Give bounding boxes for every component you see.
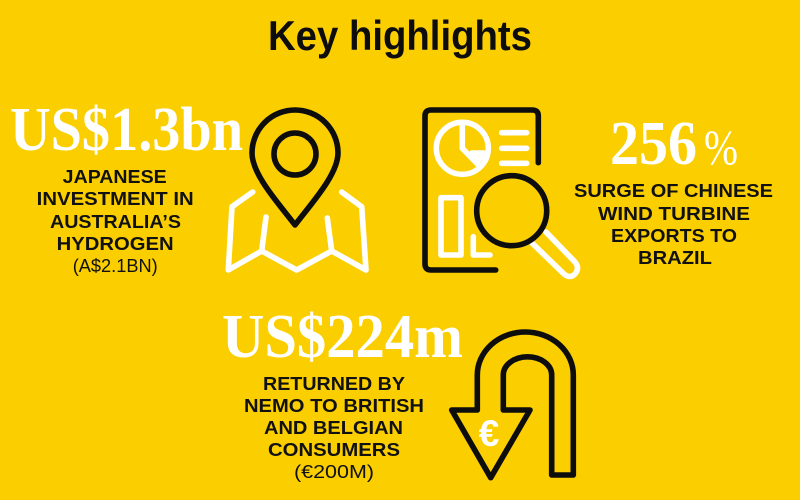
- label: wind turbine exports text: [574, 180, 773, 268]
- stat: US$224m: US$224m: [222, 303, 463, 371]
- panel: Japanese investment: [10, 96, 366, 276]
- label: Japanese investment text: AUSTRALIA’S: [50, 211, 181, 232]
- label: Nemo text: (€200M): [294, 461, 374, 482]
- label: Japanese investment text: INVESTMENT IN: [37, 188, 194, 209]
- label: Japanese investment text: JAPANESE: [63, 166, 167, 187]
- icon: map with location pin: [228, 110, 366, 270]
- stat: 256%: 256: [610, 110, 697, 178]
- panel: Chinese wind turbine exports: [425, 110, 773, 276]
- label: Japanese investment text: [37, 166, 194, 276]
- label: Nemo text: [244, 373, 424, 482]
- stat: 256%: %: [704, 119, 738, 175]
- icon: euro sign: €: [479, 413, 499, 454]
- stat: US$1.3bn: US$1.3bn: [10, 96, 243, 164]
- panel: Nemo returned funds: [222, 303, 573, 482]
- label: Japanese investment text: (A$2.1BN): [73, 255, 158, 276]
- label: wind turbine exports text: BRAZIL: [638, 247, 712, 268]
- title: Key highlights: [268, 12, 532, 59]
- label: wind turbine exports text: WIND TURBINE: [598, 203, 750, 224]
- label: Japanese investment text: HYDROGEN: [57, 233, 174, 254]
- icon: return arrow with euro: [452, 332, 573, 478]
- label: wind turbine exports text: EXPORTS TO: [611, 225, 737, 246]
- label: wind turbine exports text: SURGE OF CHINESE: [574, 180, 773, 201]
- label: Nemo text: AND BELGIAN: [264, 417, 403, 438]
- label: Nemo text: CONSUMERS: [268, 439, 400, 460]
- label: Nemo text: NEMO TO BRITISH: [244, 395, 424, 416]
- icon: report with magnifier: [425, 110, 578, 276]
- label: Nemo text: RETURNED BY: [263, 373, 406, 394]
